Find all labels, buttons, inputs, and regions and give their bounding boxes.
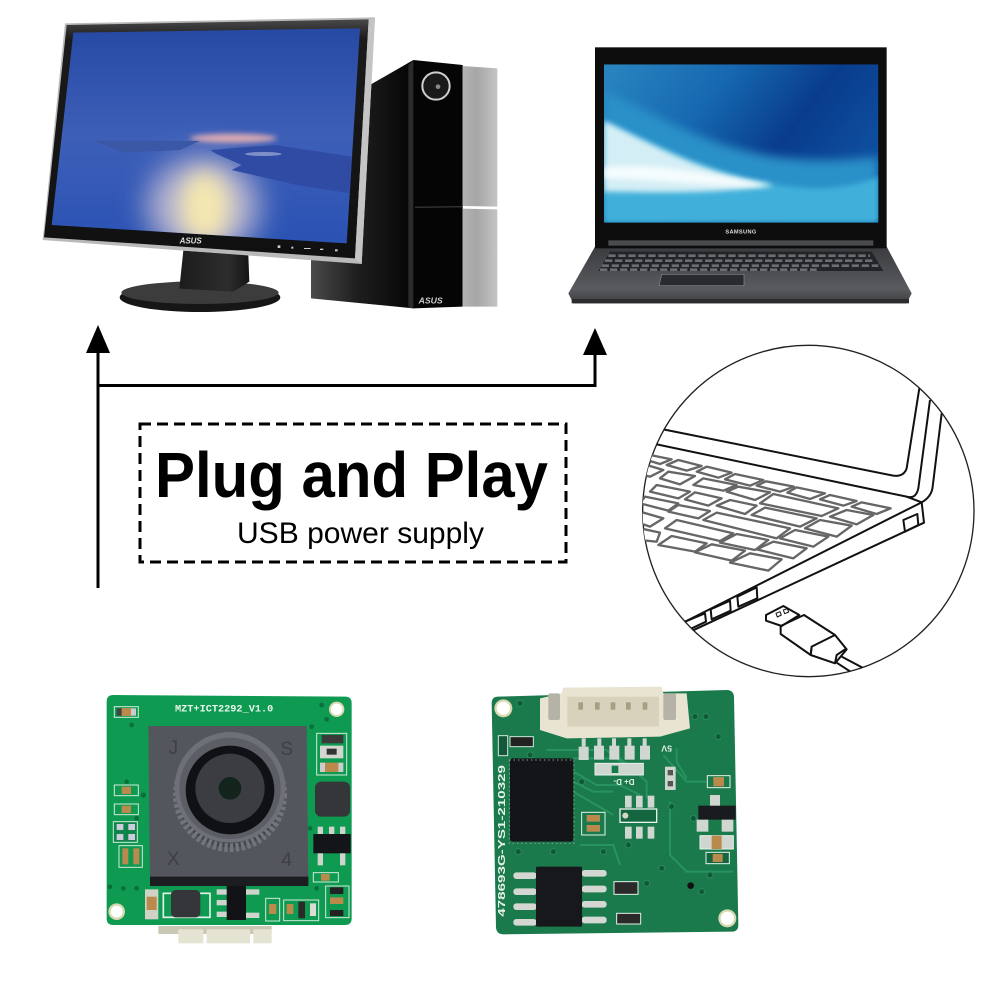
bottom components [145,886,319,921]
callout: plug and play [140,424,566,562]
monitor logo: ASUS [179,236,202,245]
green board [107,695,352,925]
laptop lid [595,47,887,248]
mounting holes [108,702,344,920]
silkscreen label: MZT+ICT2292_V1.0 [175,704,273,715]
keyboard [598,252,883,271]
lens holder block: X [167,849,180,870]
laptop screen [604,64,878,223]
camera module: back of PCB [492,687,738,934]
circular inset: USB port on laptop [640,345,974,680]
left side components [113,707,142,867]
arrow: across and up to laptop [98,328,607,387]
lens holder block [148,726,308,886]
arrow: up to desktop [86,325,110,588]
white connector [540,687,690,738]
lens [175,732,285,848]
right side components [313,733,351,918]
keyboard keys [640,455,891,571]
memory chip [513,867,607,927]
connector edge [158,926,272,943]
laptop logo: SAMSUNG [725,229,757,235]
USB plug [765,605,864,672]
lens holder block: J [168,738,178,759]
tower PC: ASUS [418,295,443,305]
monitor buttons [278,245,338,251]
lens holder block: S [280,739,293,760]
hinge [608,240,873,246]
subheading: USB power supply [237,517,484,550]
monitor screen with sunset wallpaper [47,27,363,257]
green board [492,690,738,934]
heading: Plug and Play [155,439,548,511]
passive components [498,736,736,924]
pad labels: 5V [661,744,672,754]
lens holder block: 4 [281,850,292,871]
desktop computer: monitor and tower [43,17,497,312]
connector pads [579,738,650,760]
monitor bezel [43,17,375,264]
vias [515,700,721,895]
tower PC [311,60,497,308]
camera module: front of PCB [107,695,352,943]
vias [108,703,329,891]
laptop base [568,247,912,303]
camera module: back of PCB: D+ D- [613,777,635,786]
main chip [509,758,574,843]
monitor stand [120,251,280,312]
laptop line drawing [640,388,942,680]
laptop computer [568,47,912,303]
traces [547,748,733,872]
touchpad [659,274,744,286]
mounting holes [494,699,736,927]
silkscreen code: 478693G-YS1-210329 [497,764,508,917]
